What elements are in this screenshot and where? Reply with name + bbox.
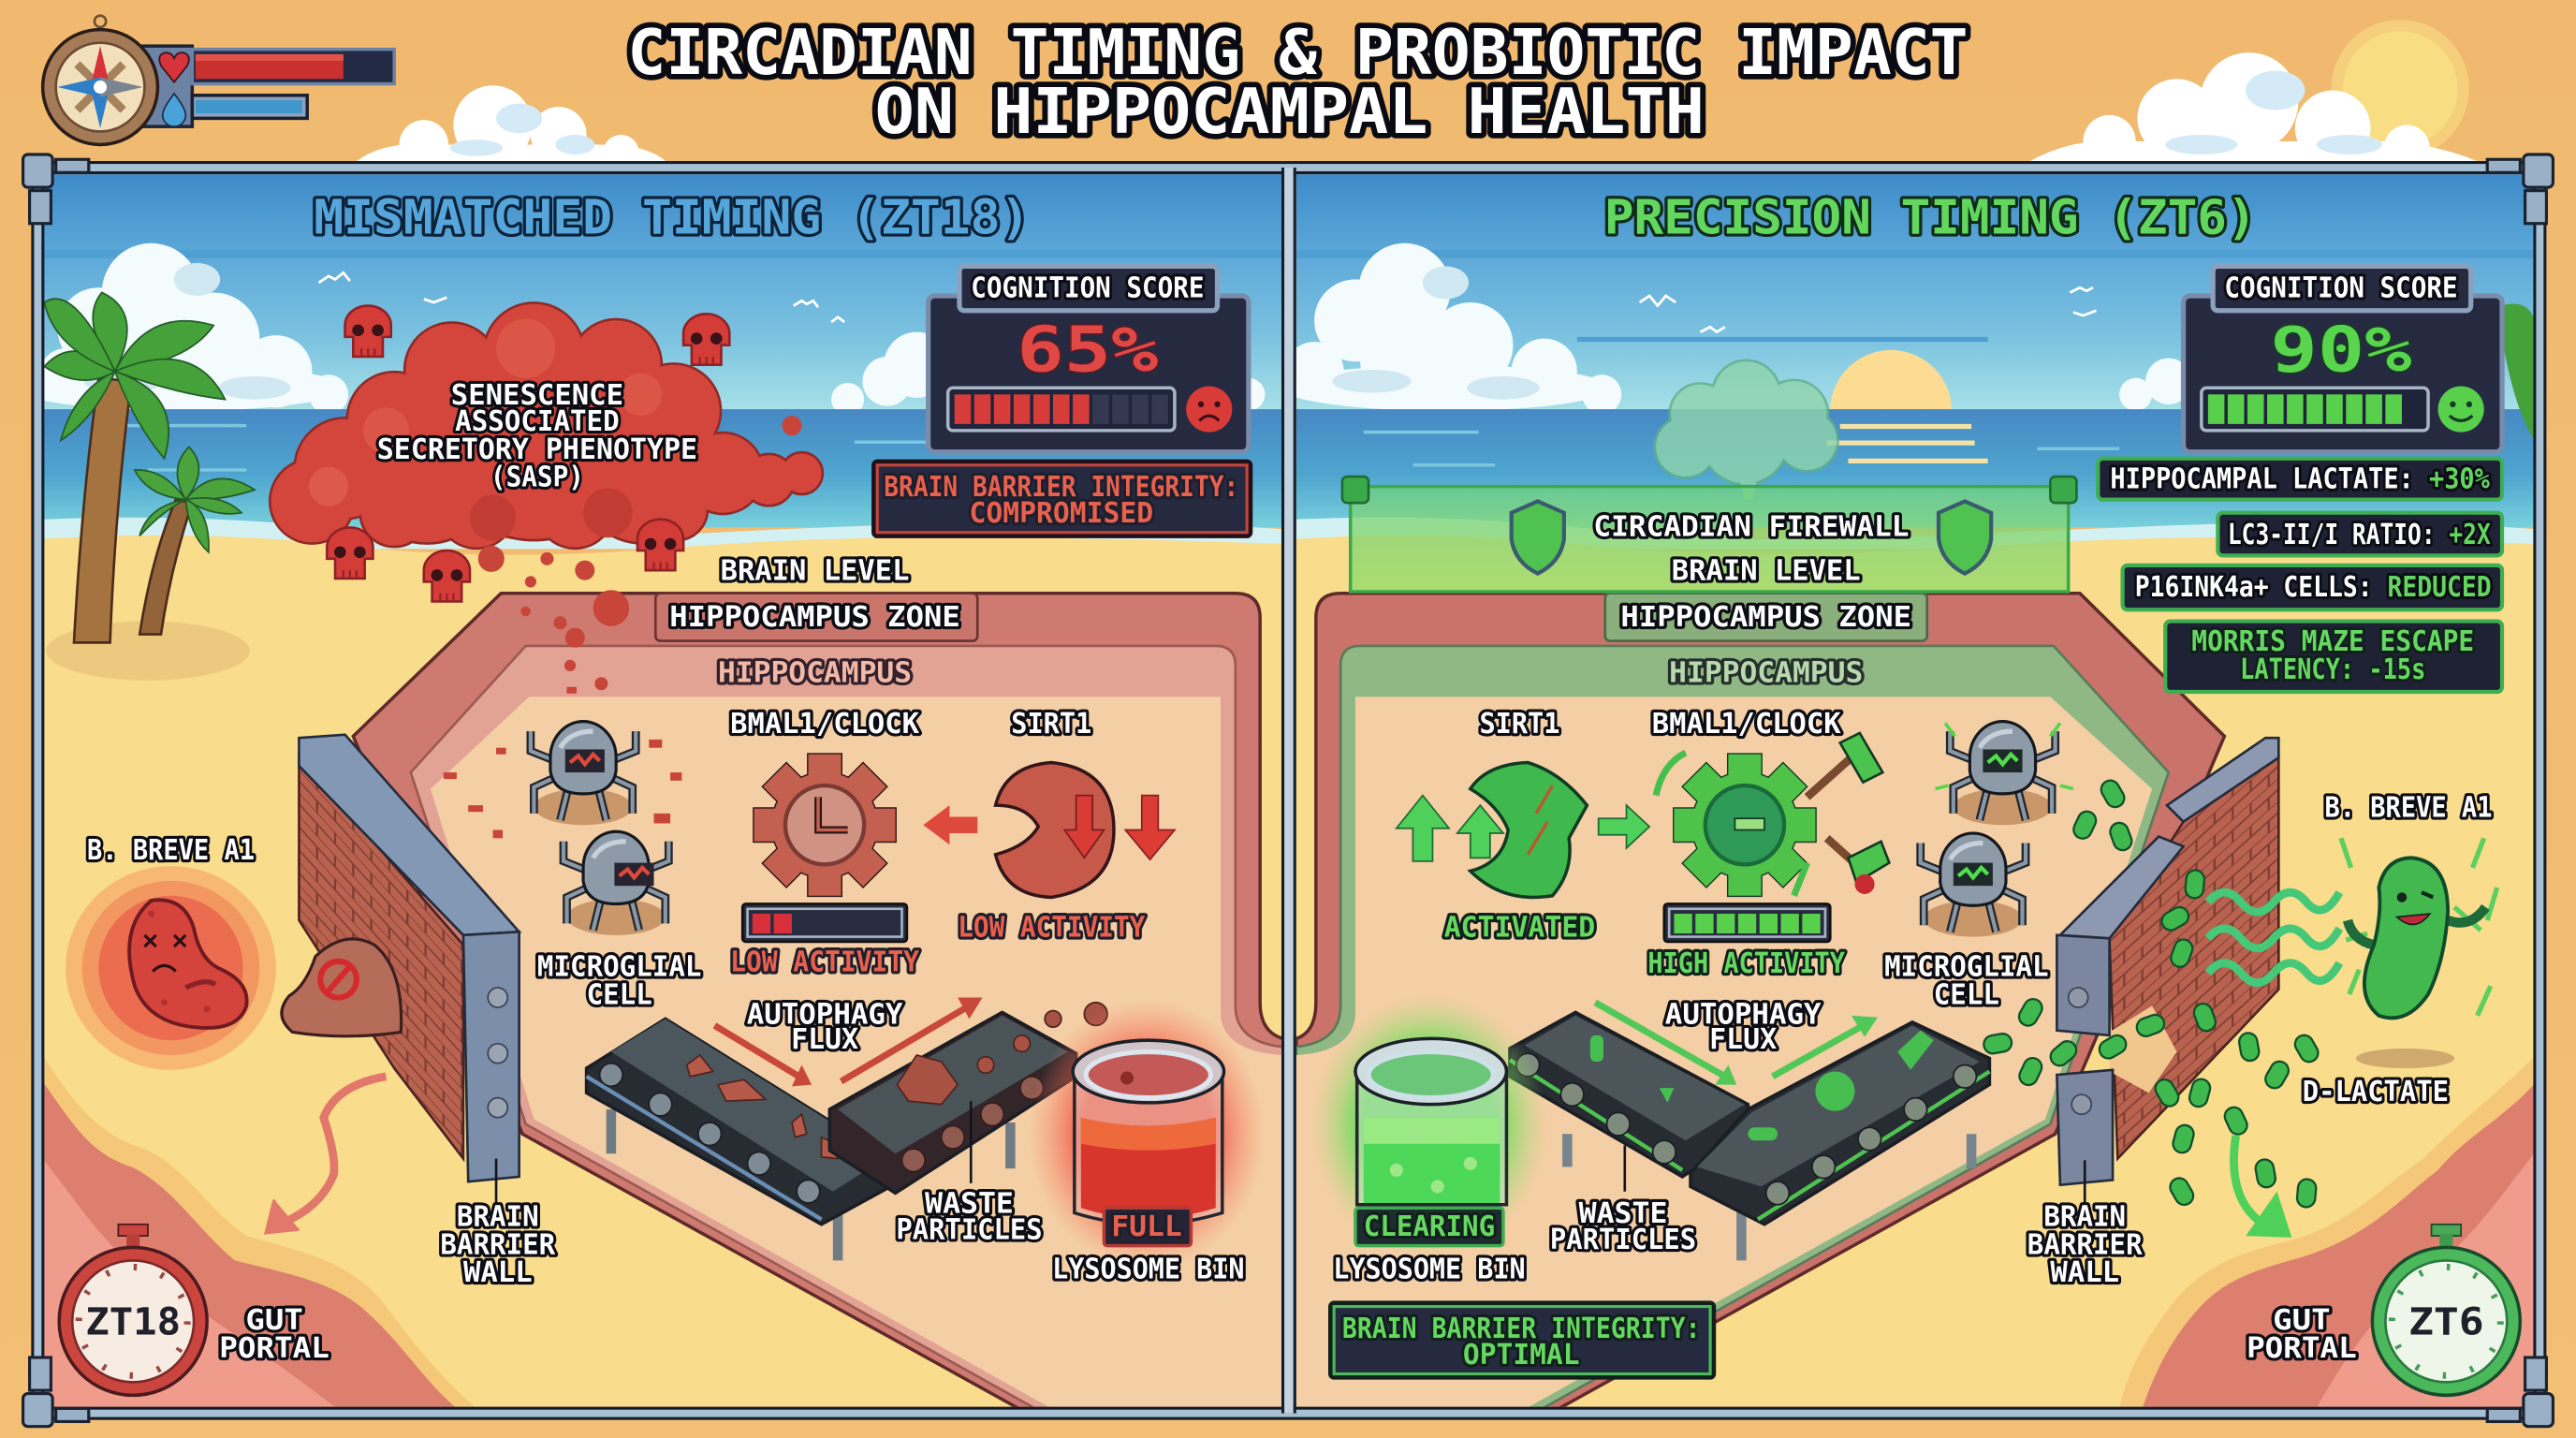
- lysosome bin label: LYSOSOME BIN: [1052, 1254, 1244, 1286]
- gut portal label: [2247, 1304, 2357, 1365]
- post upper: [2056, 935, 2110, 1035]
- green waves from probiotic: [2208, 892, 2339, 983]
- brain barrier optimal callout: OPTIMAL: [1463, 1339, 1580, 1372]
- heading: mismatched: MISMATCHED TIMING (ZT18): [314, 190, 1030, 245]
- conveyor belt right: [1690, 1022, 1989, 1260]
- brain barrier compromised callout: COMPROMISED: [970, 497, 1153, 530]
- title: ON HIPPOCAMPAL HEALTH: [875, 75, 1705, 148]
- score tab: [2213, 266, 2471, 311]
- foam: [43, 518, 1283, 549]
- microglial label: MICROGLIAL: [1884, 951, 2049, 984]
- water bar: [192, 95, 307, 118]
- microglial label: [537, 951, 701, 1012]
- score bar: [2202, 388, 2428, 431]
- sky band: [43, 250, 1283, 258]
- hippocampus label: HIPPOCAMPUS: [718, 657, 912, 690]
- skulls: [327, 306, 729, 601]
- conveyor belt right: [829, 1003, 1107, 1193]
- wall bricks: [2110, 757, 2278, 1159]
- hippocampus band: [411, 646, 1283, 1408]
- brain level outer band: [1296, 594, 2224, 1408]
- icon: b. breve sick: [66, 866, 276, 1070]
- metric: hippocampal lactate: HIPPOCAMPAL LACTATE: +30%: [2110, 462, 2490, 495]
- icon: hammer top: [1808, 733, 1882, 797]
- hippocampus zone tab: HIPPOCAMPUS ZONE: [1620, 601, 1911, 634]
- panel: precision timing: [1281, 174, 2537, 1408]
- icon: hammer bottom: [1827, 838, 1889, 894]
- activated label: ACTIVATED: [1444, 912, 1595, 945]
- brain level label: BRAIN LEVEL: [1672, 555, 1861, 588]
- hippocampus zone tab: [655, 594, 977, 641]
- microglial label: CELL: [587, 979, 652, 1012]
- cap upper: [2167, 738, 2278, 822]
- post lower: [2056, 1070, 2113, 1185]
- brain barrier compromised callout: BRAIN BARRIER INTEGRITY:: [884, 471, 1238, 504]
- sirt1 label: SIRT1: [1011, 708, 1091, 741]
- sky bands: [1296, 250, 2537, 342]
- sun on horizon: [1830, 350, 1952, 472]
- microglial label: MICROGLIAL: [537, 951, 701, 984]
- brain barrier wall: [299, 735, 520, 1181]
- metric: lc3 ratio: LC3-II/I RATIO: +2X: [2228, 519, 2491, 551]
- icon: compass: [43, 16, 157, 144]
- autophagy flux label: AUTOPHAGY: [747, 999, 902, 1032]
- hippocampus label: HIPPOCAMPUS: [1669, 657, 1863, 690]
- title: CIRCADIAN TIMING & PROBIOTIC IMPACT: [627, 16, 1969, 89]
- microglial cell bottom: [564, 831, 668, 935]
- sea: [43, 409, 1283, 527]
- status bar plate: [143, 46, 192, 126]
- sand corner: [1296, 657, 1310, 1022]
- sirt1 label: SIRT1: [1479, 708, 1559, 741]
- microglial cell top: [531, 722, 636, 825]
- b. breve label: B. BREVE A1: [87, 834, 255, 867]
- brain barrier wall label: [440, 1159, 555, 1289]
- brain barrier wall label: [2027, 1160, 2143, 1289]
- low activity bar: [742, 903, 907, 942]
- stopwatch zt18: ZT18: [85, 1299, 181, 1343]
- hippocampus zone tab: [1605, 594, 1927, 641]
- autophagy flux label: FLUX: [791, 1023, 858, 1056]
- brain barrier optimal callout: BRAIN BARRIER INTEGRITY:: [1342, 1313, 1701, 1345]
- microglial label: CELL: [1934, 979, 1999, 1012]
- waste particles label: PARTICLES: [1550, 1224, 1696, 1256]
- circadian firewall: [1342, 477, 2076, 592]
- metric: morris maze: MORRIS MAZE ESCAPE: [2191, 625, 2474, 658]
- sirt1 low activity: LOW ACTIVITY: [958, 912, 1145, 945]
- icon: shield right: [1939, 501, 1991, 574]
- brain barrier wall label: BARRIER: [440, 1228, 555, 1261]
- sand: [1296, 536, 2537, 1408]
- neutralised green cloud: [1656, 361, 1837, 500]
- wall bricks: [299, 756, 463, 1159]
- hippocampus floor: [1296, 697, 2152, 1408]
- gut portal ground: [2119, 1055, 2537, 1408]
- title: [627, 16, 1969, 148]
- waste particles label: PARTICLES: [896, 1214, 1043, 1247]
- hippocampus floor: [431, 697, 1283, 1408]
- cognition score panel: [2184, 266, 2502, 452]
- sasp label: SENESCENCE: [451, 379, 623, 412]
- autophagy flux label: FLUX: [1709, 1023, 1777, 1056]
- sky: [43, 174, 1283, 409]
- score value: 65%: [1017, 314, 1158, 387]
- hippocampus zone tab: HIPPOCAMPUS ZONE: [669, 601, 960, 634]
- icon: sirt1 enzyme: [1471, 763, 1587, 897]
- bmal1 clock label: BMAL1/CLOCK: [1652, 708, 1841, 741]
- brain level outer band: [353, 594, 1283, 1408]
- cap lower: [2060, 837, 2184, 938]
- brain barrier wall label: BRAIN: [457, 1201, 539, 1234]
- blocked blob at wall: [282, 939, 402, 1036]
- d-lactate label: D-LACTATE: [2303, 1076, 2449, 1108]
- low activity label: LOW ACTIVITY: [730, 946, 919, 978]
- wall cap: [299, 735, 520, 935]
- lysosome bin full: [1029, 999, 1265, 1269]
- brain barrier optimal callout: [1331, 1303, 1714, 1377]
- b. breve label: B. BREVE A1: [2324, 791, 2492, 824]
- sea stripes: [1364, 431, 2119, 467]
- d-lactate particles: [1983, 777, 2321, 1208]
- waste particles label: [896, 1101, 1043, 1247]
- brain level label: BRAIN LEVEL: [721, 555, 909, 588]
- HUD: compass and status bars: [43, 16, 394, 144]
- score tab: [959, 266, 1218, 311]
- palm shadows: [46, 622, 250, 681]
- full tag: [1104, 1208, 1191, 1246]
- arrow: up large: [1397, 796, 1449, 861]
- brain barrier wall label: BARRIER: [2027, 1228, 2143, 1261]
- stopwatch zt18: [59, 1225, 207, 1395]
- gut portal label: GUT: [245, 1304, 303, 1337]
- icon: sirt1 enzyme: [996, 763, 1114, 897]
- brain barrier wall label: WALL: [463, 1256, 533, 1289]
- conveyor belt left: [1510, 1012, 1748, 1177]
- arrows: flux: [1595, 1003, 1878, 1085]
- panel titles: [314, 190, 2257, 245]
- stopwatch zt6: ZT6: [2408, 1299, 2484, 1343]
- arrow: sirt1 to gear: [923, 805, 977, 844]
- brain barrier wall label: BRAIN: [2043, 1201, 2126, 1234]
- sun reflection: [1827, 424, 1988, 463]
- sky clouds: [1281, 243, 2191, 414]
- brain barrier compromised callout: [874, 462, 1251, 536]
- birds: [318, 272, 844, 322]
- score bar: [948, 388, 1175, 431]
- sasp label: [377, 379, 697, 494]
- foam: [1296, 518, 2537, 549]
- sky clouds: [17, 243, 1265, 419]
- arrow: sirt1 to gear: [1599, 805, 1649, 848]
- sky: [1296, 174, 2537, 409]
- icon: shield left: [1512, 501, 1564, 574]
- sand: [43, 536, 1283, 1408]
- icon: green gear: [1674, 755, 1815, 896]
- gut portal label: [219, 1304, 329, 1365]
- panel: mismatched timing: [17, 174, 1284, 1408]
- arrow: up small: [1457, 805, 1503, 858]
- icon: heart: [159, 52, 189, 82]
- sasp cloud: [271, 304, 822, 548]
- sand corner: [1265, 1020, 1266, 1022]
- microglial label: [1884, 951, 2049, 1012]
- sea stripes: [127, 423, 926, 472]
- conveyor belt left: [587, 1019, 890, 1260]
- arrow: leak to gut: [266, 1077, 386, 1233]
- firewall posts: [1342, 477, 2076, 503]
- high activity bar: [1664, 903, 1830, 942]
- palm trees: [44, 292, 255, 642]
- arrow: lactate to gut: [2234, 1136, 2291, 1238]
- autophagy flux label: AUTOPHAGY: [1665, 999, 1822, 1032]
- cognition score panel: [929, 266, 1249, 452]
- score value: 90%: [2271, 314, 2411, 387]
- arrow: sirt1 down: [1125, 796, 1175, 859]
- score tab: COGNITION SCORE: [971, 272, 1204, 305]
- microglial cell top: [1936, 722, 2073, 825]
- metric: p16 cells: P16INK4a+ CELLS: REDUCED: [2135, 571, 2492, 604]
- hippocampus band: [1296, 646, 2169, 1408]
- gut portal ground: [43, 1055, 476, 1408]
- brain barrier wall label: WALL: [2050, 1256, 2119, 1289]
- gut portal label: GUT: [2273, 1304, 2331, 1337]
- stopwatch zt6: [2372, 1225, 2520, 1395]
- high activity label: HIGH ACTIVITY: [1647, 947, 1845, 980]
- icon: b. breve healthy: [2341, 838, 2497, 1068]
- wall post: [463, 932, 520, 1181]
- palm edge: [2500, 303, 2537, 444]
- sasp label: (SASP): [490, 462, 584, 494]
- autophagy flux label: [1665, 999, 1822, 1056]
- lysosome bin clearing: [1311, 994, 1547, 1257]
- firewall label: CIRCADIAN FIREWALL: [1593, 510, 1909, 543]
- full tag: FULL: [1111, 1211, 1182, 1243]
- sasp label: ASSOCIATED: [455, 405, 620, 438]
- microglial cell bottom: [1921, 833, 2026, 937]
- icon: sad face: [1186, 387, 1232, 433]
- waste particles label: WASTE: [1579, 1197, 1667, 1230]
- waste particles label: [1550, 1146, 1696, 1256]
- icon: gear clock: [754, 755, 896, 896]
- birds: [1640, 287, 2097, 332]
- sea: [1296, 409, 2537, 527]
- brain barrier wall breached: [2056, 738, 2278, 1185]
- arrows: gear activity: [1656, 753, 1808, 896]
- wall breach: [2110, 1005, 2177, 1093]
- bmal1 clock label: BMAL1/CLOCK: [730, 708, 919, 741]
- gut portal label: PORTAL: [2247, 1332, 2357, 1365]
- lysosome bin label: LYSOSOME BIN: [1333, 1254, 1526, 1286]
- clearing tag: CLEARING: [1364, 1211, 1495, 1243]
- icon: top-right sun: [2331, 20, 2469, 158]
- arrows: flux: [714, 998, 983, 1086]
- falling toxin debris: [444, 416, 801, 838]
- autophagy flux label: [747, 999, 902, 1056]
- heading: precision: PRECISION TIMING (ZT6): [1604, 190, 2257, 245]
- icon: water drop: [163, 94, 185, 126]
- metric: morris maze: [2165, 622, 2502, 692]
- gut portal label: PORTAL: [219, 1332, 329, 1365]
- metric: morris maze: LATENCY: -15s: [2240, 653, 2425, 686]
- health bar: [192, 50, 394, 84]
- score tab: COGNITION SCORE: [2224, 272, 2458, 305]
- icon: happy face: [2438, 387, 2484, 433]
- waste particles label: WASTE: [925, 1188, 1014, 1221]
- top clouds: [355, 52, 2481, 171]
- sasp label: SECRETORY PHENOTYPE: [377, 433, 697, 466]
